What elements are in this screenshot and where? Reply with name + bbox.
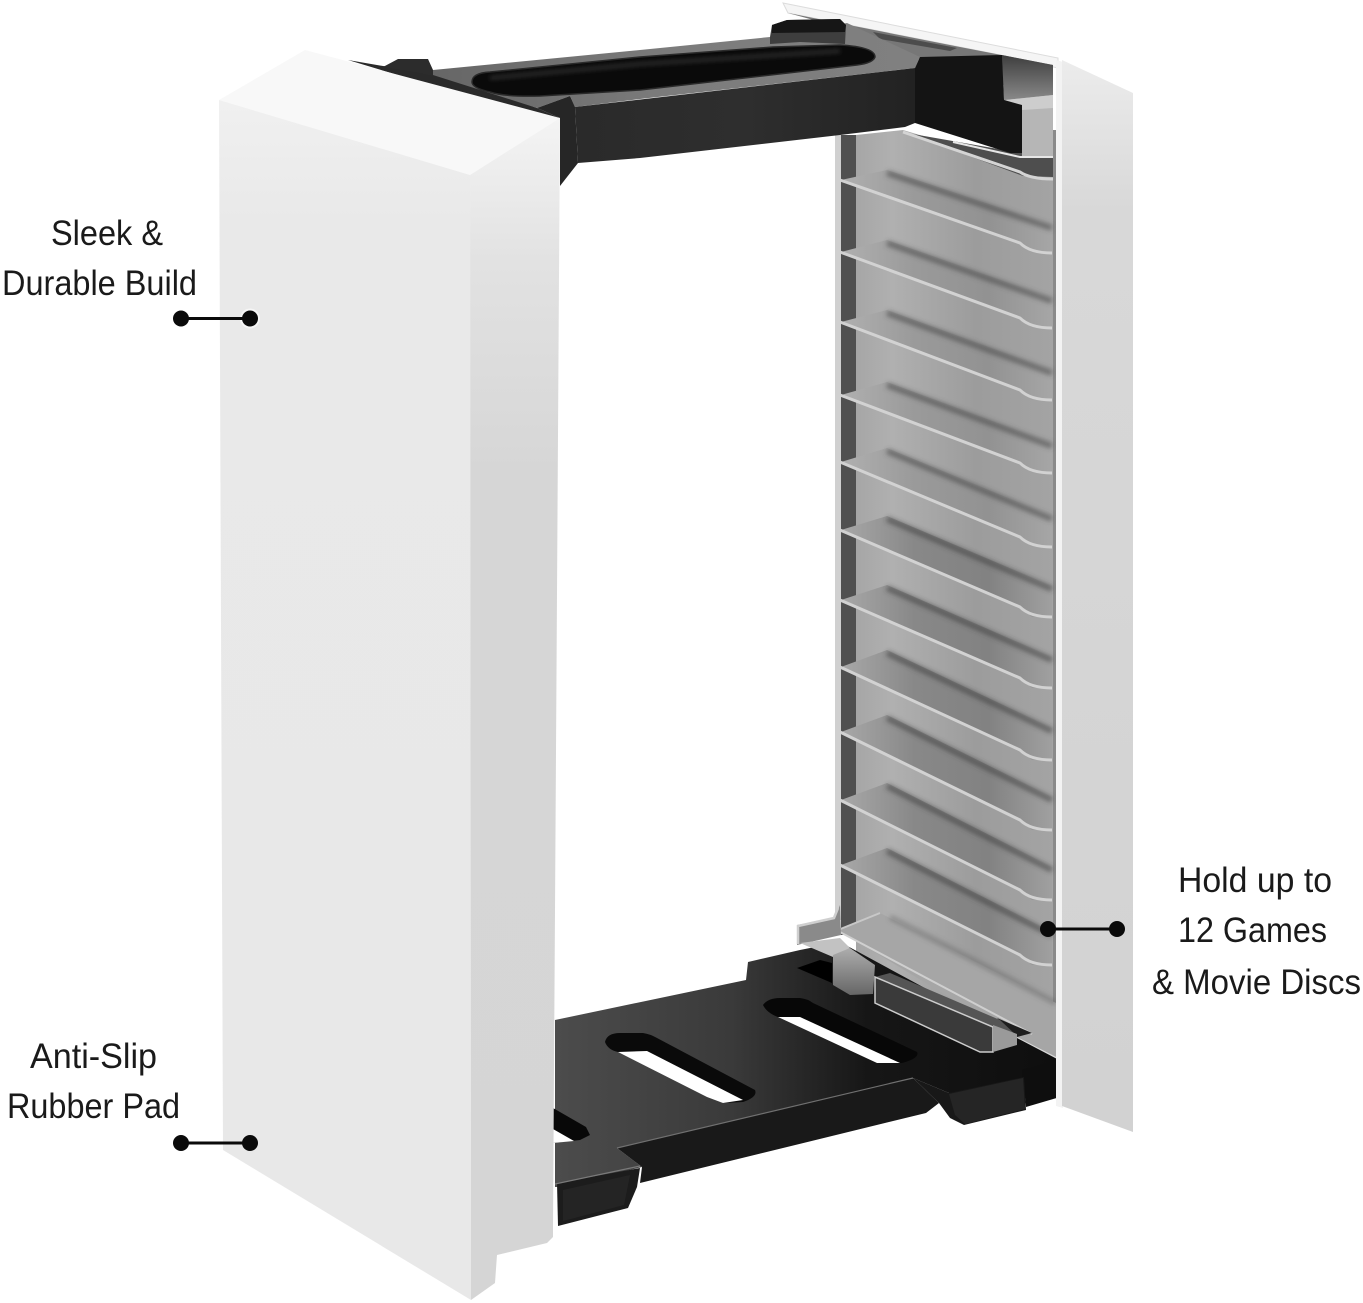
front face [219, 100, 471, 1300]
shelf slot 3 [840, 310, 1052, 400]
disc tray wall [835, 130, 1056, 1058]
support block [833, 948, 875, 995]
rear square hole [797, 960, 832, 983]
wall foot [797, 905, 841, 945]
middle slot [605, 1033, 756, 1103]
wall foot shelf [800, 938, 850, 957]
rear right nub [770, 19, 846, 44]
right black block [915, 55, 1022, 153]
left foot [557, 1168, 640, 1226]
callout text [2, 214, 197, 303]
callout pointer [1040, 921, 1125, 937]
right side panel [1056, 60, 1133, 1132]
top plate [433, 23, 920, 108]
left partial slot [553, 1108, 590, 1143]
callout text: Durable Build [2, 264, 197, 303]
shelf slot 7 [840, 585, 1052, 688]
callout text: Rubber Pad [7, 1087, 180, 1126]
front lower lip [617, 1078, 939, 1183]
inner grey latch [1002, 55, 1053, 157]
channel guide [875, 973, 1032, 1052]
corner post [537, 96, 578, 186]
shelf slot 6 [840, 516, 1052, 617]
callout text [7, 1037, 180, 1126]
top face [219, 50, 560, 175]
callout: hold up to 12 games and movie discs [1040, 861, 1361, 1002]
front bar [575, 68, 915, 163]
callout: sleek and durable build [2, 214, 260, 328]
shelf slot 10 [840, 783, 1052, 900]
shelf slot 8 [840, 650, 1052, 760]
shelf slots [838, 170, 1056, 1060]
shelf slot 5 [840, 448, 1052, 547]
shelf slot 9 [840, 715, 1052, 830]
callout: anti-slip rubber pad [7, 1037, 258, 1151]
callout text: Hold up to [1178, 861, 1332, 900]
callout text: 12 Games [1178, 911, 1327, 950]
left side panel [219, 50, 560, 1300]
base plate [553, 905, 1060, 1226]
right rear block [1022, 1060, 1060, 1107]
shelf slot 12 [838, 913, 1056, 1060]
top bracket [348, 19, 1053, 186]
oval handle opening [472, 45, 875, 96]
shelf slot 11 [840, 848, 1052, 965]
top surface [555, 942, 1059, 1187]
right slot [763, 998, 917, 1063]
back panel top edge [783, 3, 1058, 100]
right foot [913, 1077, 1026, 1125]
left corner sliver [348, 60, 560, 118]
callout pointer [173, 1135, 258, 1151]
callout text [1152, 861, 1361, 1002]
shelf slot 2 [840, 240, 1052, 328]
shelf slot 1 [840, 170, 1052, 253]
end face [470, 118, 560, 1300]
callout pointer [173, 308, 260, 328]
callout text: Sleek & [51, 214, 163, 253]
callout text: Anti-Slip [30, 1037, 157, 1076]
rear left nub [383, 59, 433, 76]
shelf slot 4 [840, 382, 1052, 473]
storage tower product illustration [219, 3, 1133, 1300]
